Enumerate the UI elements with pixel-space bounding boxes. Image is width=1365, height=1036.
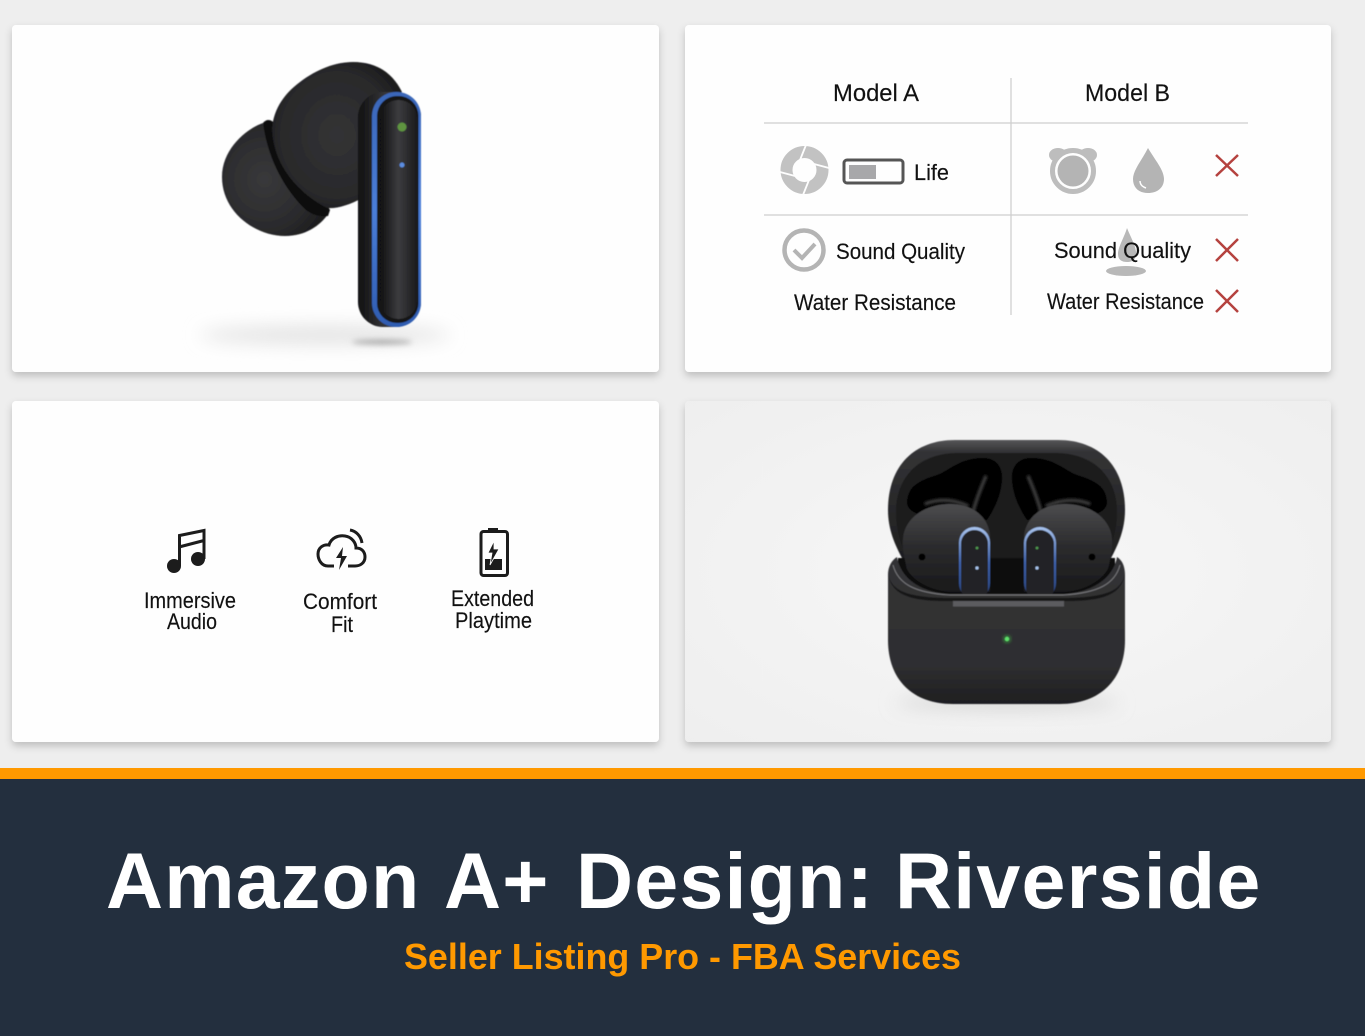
- title: Riverside: [895, 836, 1262, 925]
- left earbud: [903, 504, 990, 602]
- earbud shadow: [200, 326, 450, 344]
- icon: round device: [1049, 148, 1097, 192]
- icon: music notes: [167, 530, 205, 573]
- icon: earbuds in open case: [888, 440, 1125, 704]
- icon: cloud and bolt: [318, 530, 365, 570]
- icon: water drop: [1133, 148, 1164, 193]
- panel: comparison table: [685, 25, 1331, 372]
- label: Extended Playtime: Playtime: [455, 608, 532, 633]
- label: Comfort Fit: Comfort: [303, 589, 377, 614]
- label: Water Resistance, Model B: Water Resistance: [1047, 289, 1204, 314]
- icon: red cross, water: [1216, 290, 1238, 312]
- case lid: [888, 440, 1125, 560]
- icon: earbud: [222, 62, 421, 327]
- label: Extended Playtime: Extended: [451, 586, 534, 611]
- label: Extended Playtime: [451, 586, 534, 633]
- case base: [888, 557, 1125, 704]
- right earbud: [1024, 504, 1112, 602]
- heading: Model A: Model A: [833, 80, 919, 107]
- subtitle: Seller Listing Pro - FBA Services: [404, 936, 961, 977]
- label: Comfort Fit: [303, 589, 377, 637]
- title: A+: [444, 836, 550, 925]
- label: Life: Life: [914, 160, 949, 185]
- footer banner: [0, 768, 1365, 1036]
- icon: red cross: [1216, 155, 1238, 176]
- label: Sound Quality, Model A: Sound Quality: [836, 239, 965, 264]
- case well: [898, 558, 1115, 600]
- icon: battery: [844, 160, 903, 183]
- title: Design:: [576, 836, 874, 925]
- label: Immersive Audio: [144, 588, 236, 634]
- icon: drop and puddle: [1106, 228, 1146, 276]
- label: Comfort Fit: Fit: [331, 612, 353, 637]
- icon: charging battery: [481, 528, 508, 576]
- panel: features: [12, 401, 659, 742]
- title: Amazon: [106, 836, 420, 925]
- case shadow: [895, 697, 1119, 709]
- icon: red cross, sound: [1216, 239, 1238, 261]
- label: Sound Quality, Model B: Sound Quality: [1054, 238, 1191, 263]
- label: Immersive Audio: Audio: [167, 609, 217, 634]
- icon: check circle: [784, 230, 824, 270]
- panel: charging case: [685, 401, 1331, 742]
- panel: product earbud: [12, 25, 659, 372]
- label: Immersive Audio: Immersive: [144, 588, 236, 613]
- label: Water Resistance, Model A: Water Resistance: [794, 290, 956, 315]
- icon: aperture ring: [780, 145, 829, 195]
- table grid lines: [764, 78, 1248, 315]
- heading: Model B: Model B: [1085, 80, 1170, 107]
